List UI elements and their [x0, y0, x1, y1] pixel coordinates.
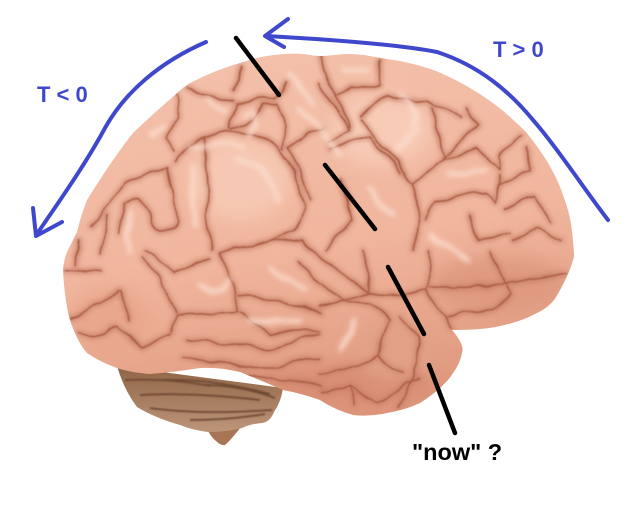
- sulci: dark lines: [65, 57, 563, 407]
- label: T > 0: T > 0: [493, 37, 544, 62]
- label: T < 0: T < 0: [37, 82, 88, 107]
- illustration: brain: [50, 40, 590, 445]
- sulci: soft shadow: [65, 57, 563, 407]
- cerebrum: [63, 54, 574, 416]
- broad shading: [70, 95, 570, 405]
- cerebellum and brain stem: [117, 366, 283, 445]
- label: "now" ?: "now" ?: [412, 439, 502, 465]
- gyri highlights: [128, 70, 485, 350]
- arrow: T > 0 (curved right): [265, 19, 608, 220]
- dashed black line: "now" divider: [236, 38, 455, 433]
- arrow: T < 0 (curved left): [33, 42, 206, 236]
- infographic canvas: [31, 16, 610, 460]
